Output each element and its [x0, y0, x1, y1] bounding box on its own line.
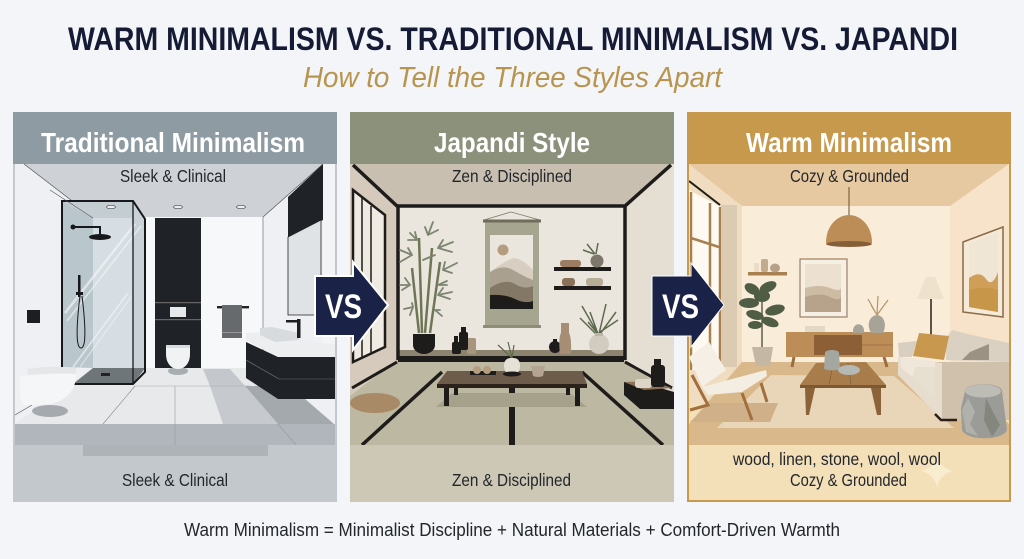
floor rug shadow	[83, 445, 268, 456]
wall-hung toilet	[166, 345, 190, 375]
caption bottom: Sleek & Clinical	[122, 470, 228, 490]
fiddle leaf plant	[739, 279, 786, 366]
black wall panel	[155, 218, 201, 368]
arrow: second VS: VS	[662, 288, 699, 326]
stone stool	[961, 384, 1007, 438]
wall shelf	[748, 259, 787, 276]
illustration: warm living room	[689, 164, 1009, 445]
arrow: second VS	[652, 263, 724, 347]
heading: japandi style: Japandi Style	[434, 127, 590, 158]
caption top: Cozy & Grounded	[790, 166, 909, 186]
caption top: Zen & Disciplined	[452, 166, 572, 186]
wall control	[27, 310, 40, 323]
shoji window	[353, 190, 385, 362]
floor cushion	[350, 393, 400, 413]
ceiling lights	[174, 205, 246, 209]
caption bottom: Zen & Disciplined	[452, 470, 571, 490]
heading: warm minimalism: Warm Minimalism	[746, 127, 952, 158]
black upper panel	[288, 164, 323, 237]
bamboo plant	[400, 222, 457, 354]
ledge vases	[452, 323, 571, 354]
framed art	[800, 259, 847, 317]
coffee table	[800, 350, 886, 415]
curtain	[721, 205, 737, 367]
panel: traditional minimalism	[13, 112, 337, 502]
wooden sideboard	[786, 296, 893, 367]
hanging scroll	[483, 212, 541, 328]
left toilet	[15, 367, 76, 417]
floor lamp	[917, 277, 944, 336]
potted plant	[580, 304, 618, 354]
arrow: first VS: VS	[325, 288, 362, 326]
illustration: japandi room	[350, 164, 674, 445]
footer formula: Warm Minimalism = Minimalist Discipline + Natural Materials + Comfort-Driven Warmth	[184, 520, 840, 540]
vanity	[246, 319, 335, 399]
towel rail and towel	[217, 305, 249, 338]
lounge chair	[689, 342, 767, 420]
materials text: wood, linen, stone, wool, wool	[732, 449, 941, 469]
window	[689, 181, 722, 370]
shower enclosure	[50, 190, 145, 384]
subtitle: How to Tell the Three Styles Apart	[303, 62, 724, 94]
heading: traditional minimalism: Traditional Minimalism	[41, 127, 305, 158]
wall shelves	[554, 243, 611, 290]
right wall strip	[323, 164, 324, 165]
panel: japandi style	[350, 112, 674, 502]
caption bottom: Cozy & Grounded	[790, 470, 907, 490]
arrow: first VS	[315, 262, 388, 350]
low table	[436, 342, 587, 407]
sofa	[898, 330, 1009, 423]
pendant lamp	[826, 187, 872, 247]
right wall art	[963, 227, 1003, 317]
caption top: Sleek & Clinical	[120, 166, 226, 186]
mirror	[288, 220, 321, 315]
illustration: minimalist bathroom	[13, 164, 337, 445]
corner side box	[624, 359, 674, 409]
sparkle	[921, 456, 953, 487]
panel: warm minimalism	[687, 112, 1011, 501]
